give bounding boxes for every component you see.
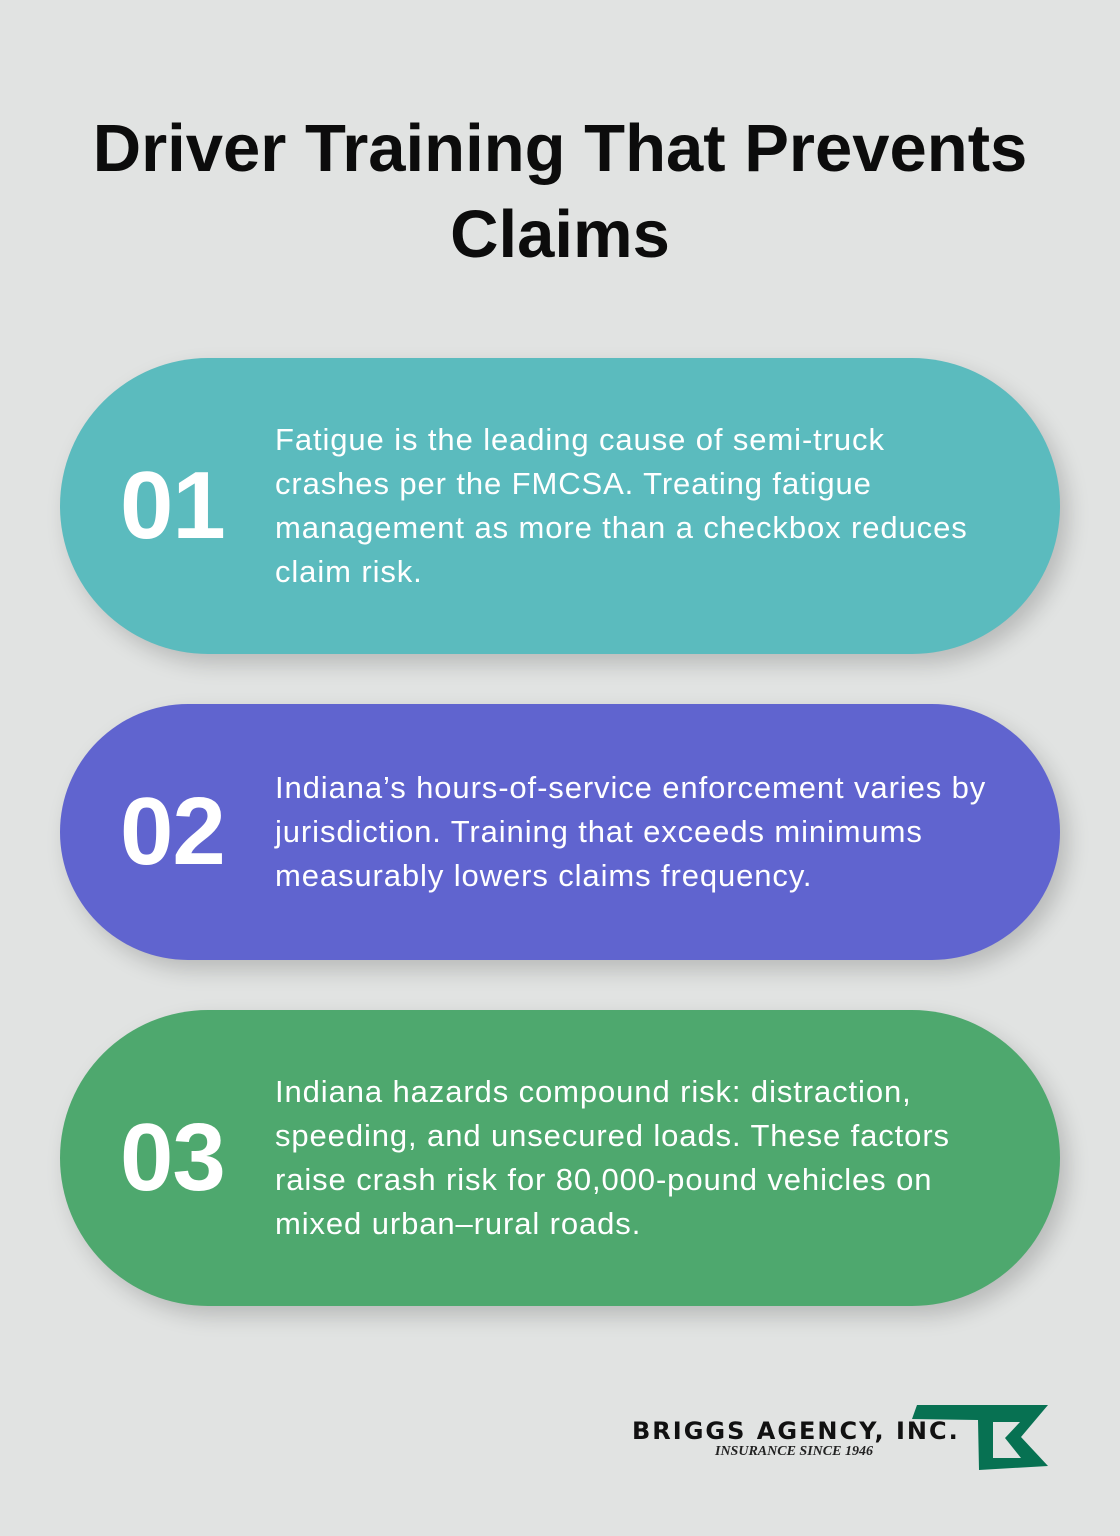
text 01: management as more than a checkbox reduces bbox=[275, 510, 968, 545]
logo tagline: INSURANCE SINCE 1946 bbox=[715, 1444, 873, 1459]
text 01: crashes per the FMCSA. Treating fatigue bbox=[275, 466, 872, 501]
text 02: measurably lowers claims frequency. bbox=[275, 858, 812, 893]
text 03: raise crash risk for 80,000-pound vehicles on bbox=[275, 1162, 932, 1197]
text 03: mixed urban–rural roads. bbox=[275, 1206, 641, 1241]
text 01: claim risk. bbox=[275, 554, 423, 589]
title: Claims bbox=[450, 197, 670, 272]
text 03: speeding, and unsecured loads. These factors bbox=[275, 1118, 950, 1153]
text 02: Indiana’s hours-of-service enforcement varies by bbox=[275, 770, 986, 805]
number 01: 01 bbox=[120, 452, 225, 559]
text 03 bbox=[275, 1074, 950, 1241]
card 02 bbox=[60, 704, 1060, 960]
text 01 bbox=[275, 422, 968, 589]
title: Driver Training That Prevents bbox=[93, 111, 1027, 186]
title bbox=[93, 111, 1027, 272]
text 01: Fatigue is the leading cause of semi-truck bbox=[275, 422, 885, 457]
card 01 bbox=[60, 358, 1060, 654]
text 02 bbox=[274, 770, 986, 893]
text 03: Indiana hazards compound risk: distraction, bbox=[275, 1074, 912, 1109]
number 02: 02 bbox=[120, 778, 225, 885]
logo text: BRIGGS AGENCY, INC. bbox=[632, 1417, 960, 1445]
number 03: 03 bbox=[120, 1104, 225, 1211]
logo bbox=[632, 1405, 1048, 1470]
text 02: jurisdiction. Training that exceeds minimums bbox=[275, 814, 923, 849]
logo mark bbox=[912, 1405, 1048, 1470]
card 03 bbox=[60, 1010, 1060, 1306]
